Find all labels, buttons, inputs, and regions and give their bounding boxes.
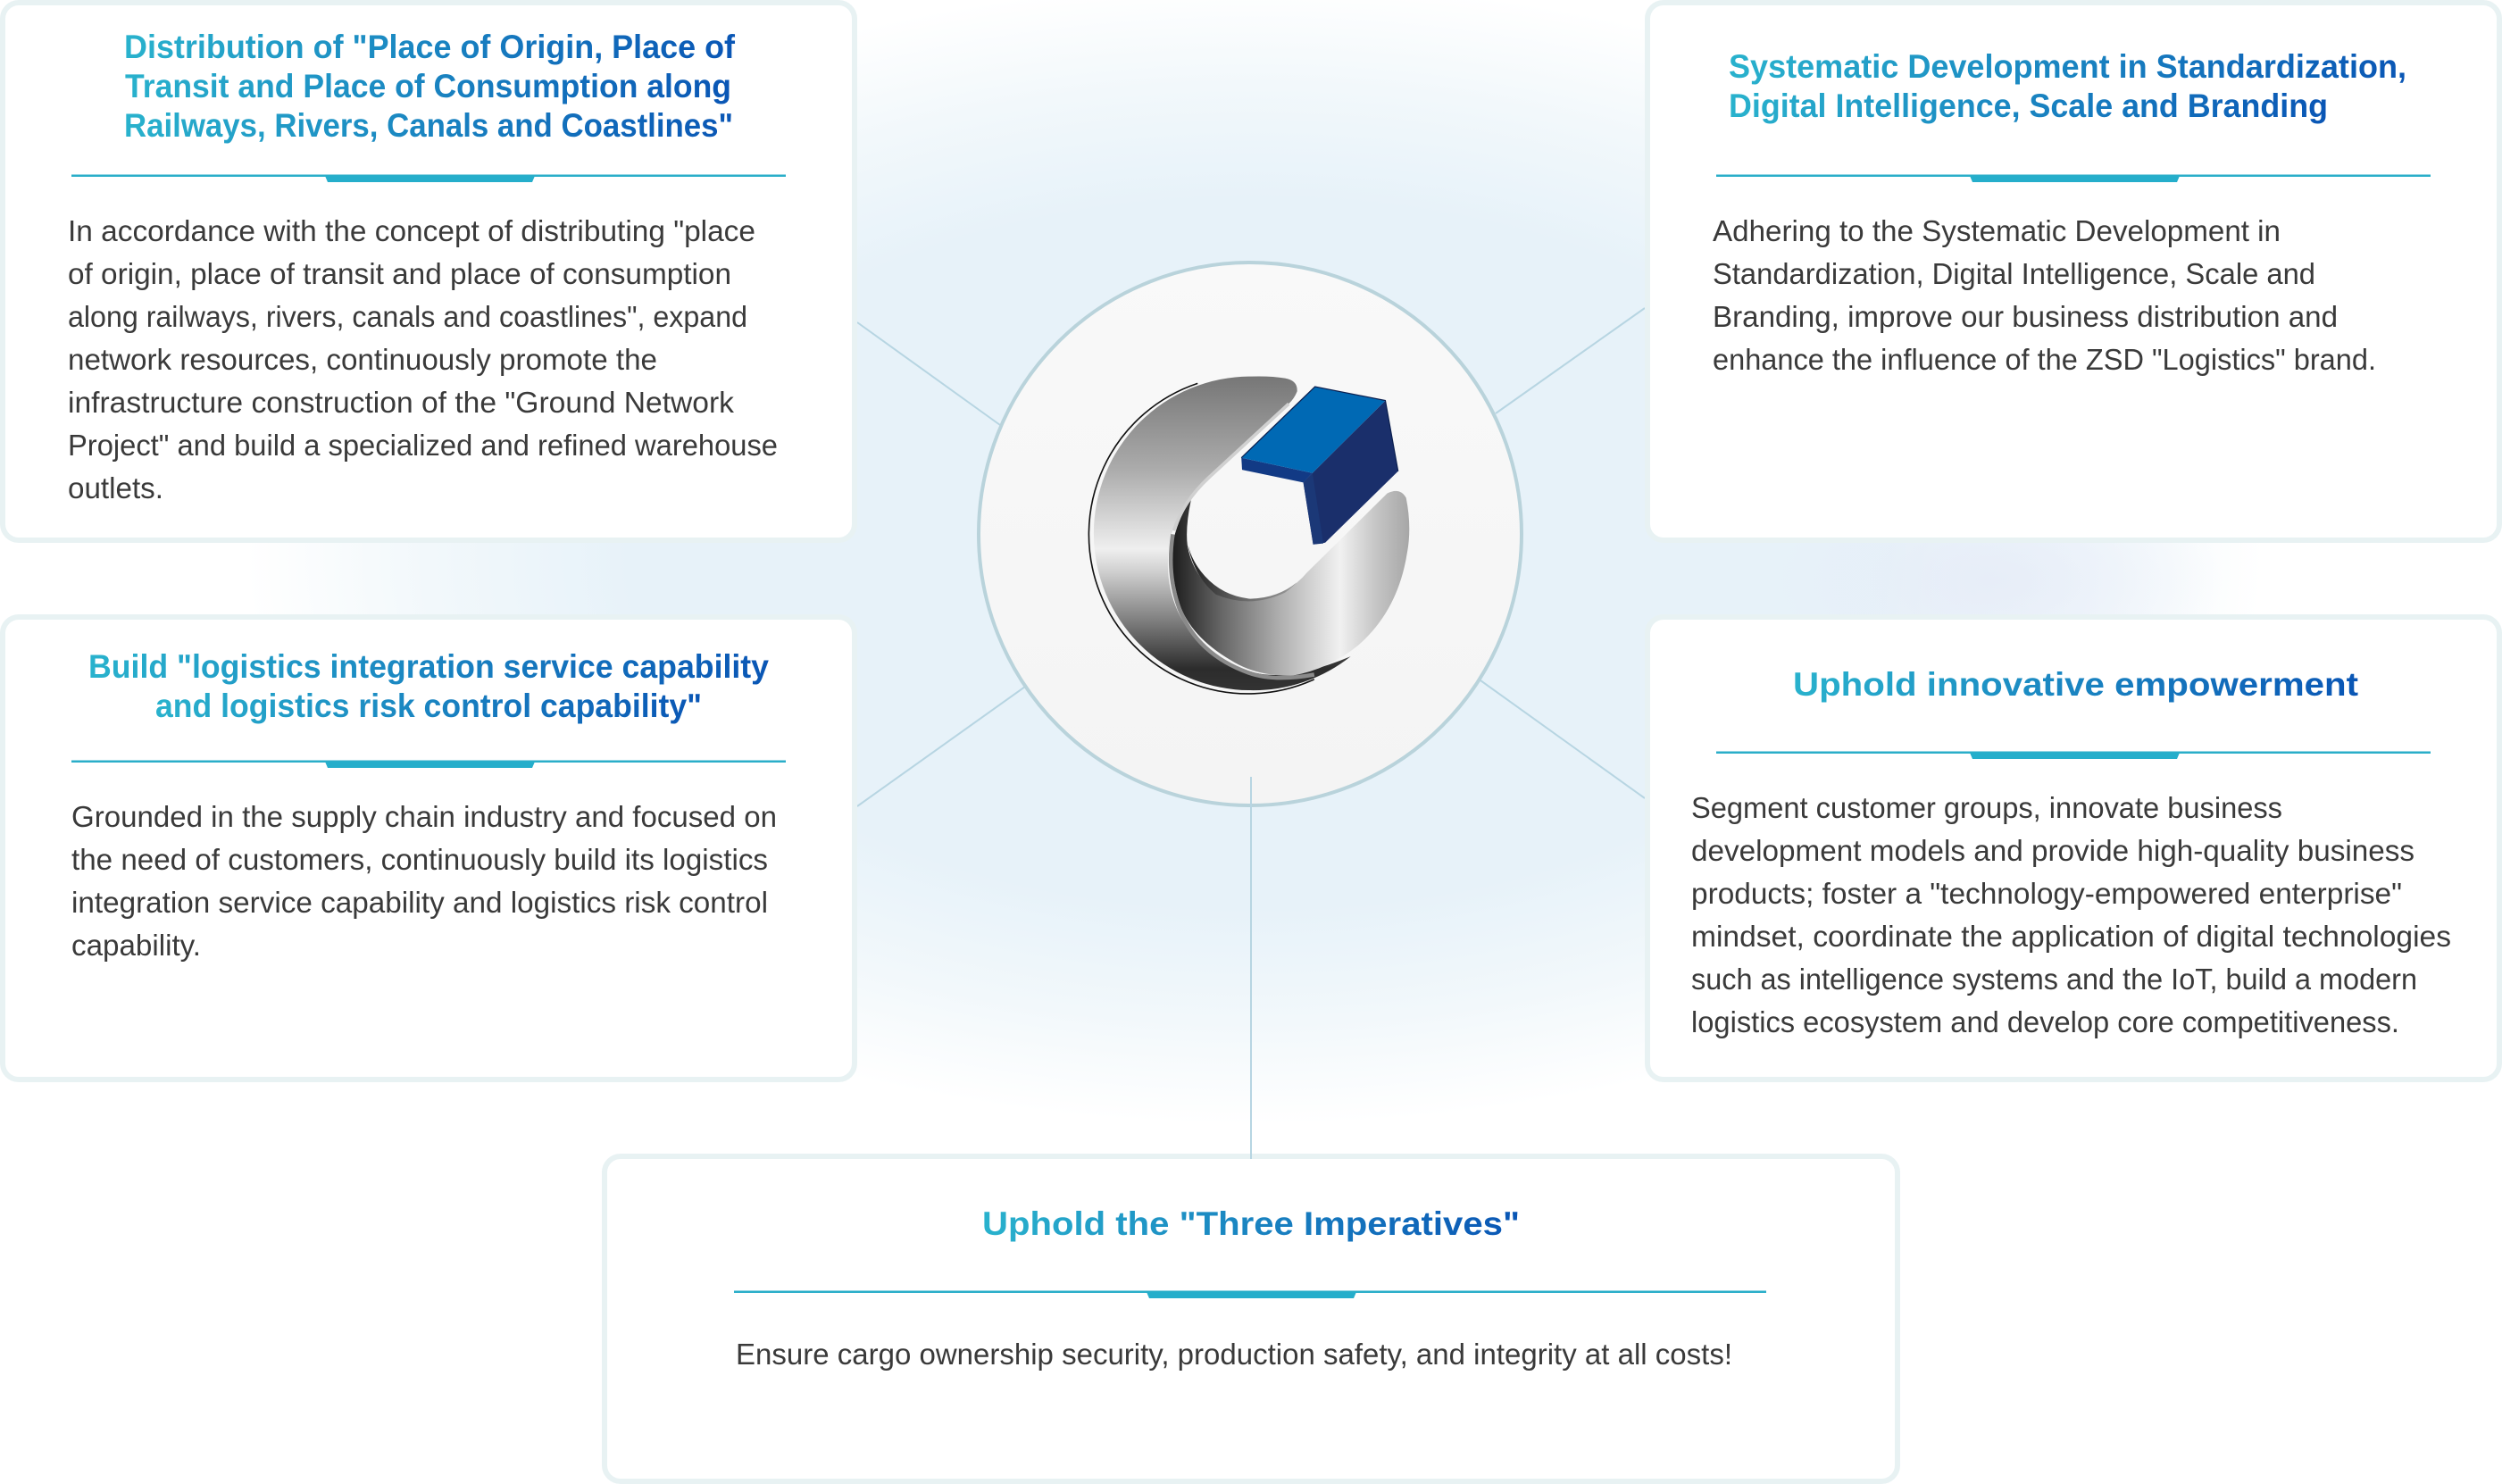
connector tip over bottom panel border [1250, 1152, 1252, 1159]
panel card [1647, 617, 2499, 1080]
central circle with logo [979, 263, 1522, 805]
panel: systematic development [1647, 3, 2499, 540]
panel: logistics integration capability [3, 617, 855, 1080]
heading: Uphold the "Three Imperatives" [982, 1205, 1520, 1242]
heading: Systematic Development in Standardization, [1729, 48, 2406, 85]
icon: company logo [1088, 376, 1409, 694]
body text: Segment customer groups, innovate business [1691, 792, 2282, 825]
body text: development models and provide high-quality business [1691, 835, 2414, 868]
body text [1691, 792, 2451, 1039]
body text: capability. [71, 930, 201, 963]
body text: outlets. [68, 472, 163, 505]
heading: Transit and Place of Consumption along [125, 68, 731, 104]
body text: such as intelligence systems and the IoT, build a modern [1691, 963, 2417, 996]
heading [88, 648, 769, 724]
panel card [605, 1156, 1897, 1481]
divider [734, 1291, 1766, 1298]
panel card [3, 3, 855, 540]
body text: Standardization, Digital Intelligence, Scale and [1713, 258, 2315, 291]
body text [71, 801, 777, 963]
connector lines [857, 308, 1645, 806]
heading: Uphold innovative empowerment [1793, 666, 2358, 703]
body text [68, 215, 778, 505]
divider [1716, 752, 2431, 759]
divider [71, 175, 786, 182]
body text: Ensure cargo ownership security, production safety, and integrity at all costs! [736, 1338, 1732, 1371]
body text: network resources, continuously promote the [68, 344, 657, 377]
body text: of origin, place of transit and place of consumption [68, 258, 731, 291]
panel card [3, 617, 855, 1080]
body text: enhance the influence of the ZSD "Logistics" brand. [1713, 344, 2376, 377]
body text: mindset, coordinate the application of digital technologies [1691, 921, 2451, 954]
body text: In accordance with the concept of distributing "place [68, 215, 755, 248]
body text: the need of customers, continuously build its logistics [71, 844, 768, 877]
vertical connector to bottom panel [1250, 777, 1252, 1159]
body text: along railways, rivers, canals and coastlines", expand [68, 301, 747, 334]
panel: three imperatives [605, 1156, 1897, 1481]
heading: Distribution of "Place of Origin, Place of [124, 29, 736, 65]
body text: infrastructure construction of the "Ground Network [68, 387, 734, 420]
body text: integration service capability and logistics risk control [71, 887, 768, 920]
circle [979, 263, 1522, 805]
body text [1713, 215, 2376, 377]
heading: and logistics risk control capability" [155, 688, 702, 724]
body text: Branding, improve our business distribution and [1713, 301, 2338, 334]
divider [71, 761, 786, 768]
panel card [1647, 3, 2499, 540]
heading [1729, 48, 2406, 124]
body text: logistics ecosystem and develop core competitiveness. [1691, 1006, 2399, 1039]
body text: Project" and build a specialized and refined warehouse [68, 429, 778, 463]
heading: Digital Intelligence, Scale and Branding [1729, 88, 2328, 124]
heading [124, 29, 736, 144]
heading: Railways, Rivers, Canals and Coastlines" [124, 107, 733, 144]
divider [1716, 175, 2431, 182]
panel: distribution of origin, transit and consumption [3, 3, 855, 540]
body text: Grounded in the supply chain industry and focused on [71, 801, 777, 834]
body text: products; foster a "technology-empowered enterprise" [1691, 878, 2402, 911]
body text: Adhering to the Systematic Development in [1713, 215, 2281, 248]
heading: Build "logistics integration service capability [88, 648, 769, 685]
panel: innovative empowerment [1647, 617, 2499, 1080]
